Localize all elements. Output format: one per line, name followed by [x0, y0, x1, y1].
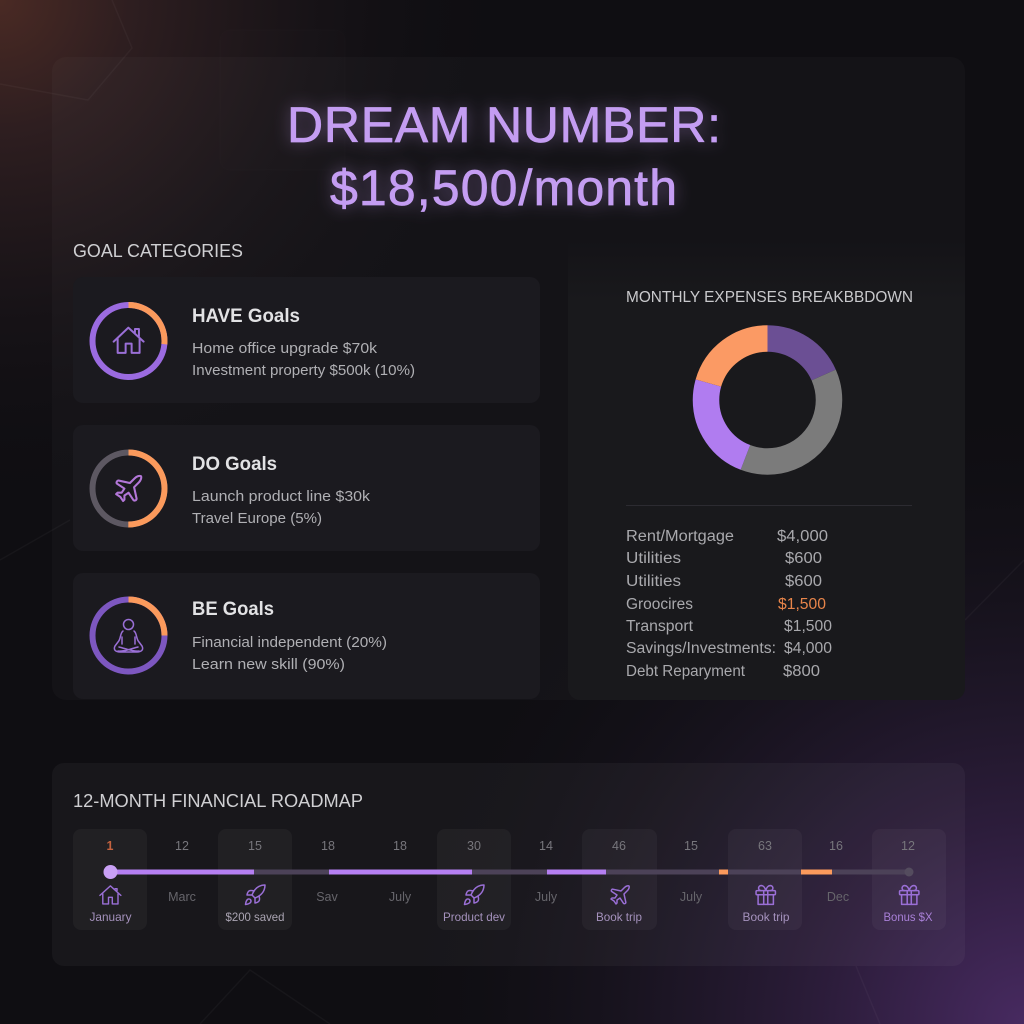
title — [287, 97, 721, 216]
month labels: July — [680, 890, 703, 904]
month labels — [168, 890, 849, 904]
month numbers: 14 — [539, 839, 553, 853]
month numbers: 63 — [758, 839, 772, 853]
month labels: July — [535, 890, 558, 904]
expense list: Debt Reparyment — [626, 663, 746, 680]
month labels: Dec — [827, 890, 849, 904]
icon: house — [114, 328, 144, 353]
milestone labels: Product dev — [443, 910, 505, 924]
text: HAVE goals: Home office upgrade $70k — [192, 340, 378, 357]
progress ring: BE — [92, 600, 164, 672]
panel: BE goals — [73, 573, 540, 699]
title: DREAM NUMBER: — [287, 97, 721, 153]
icon: gift milestone — [756, 886, 775, 904]
icon: gift milestone — [900, 886, 919, 904]
text: HAVE goals: Investment property $500k (10%) — [192, 362, 415, 379]
text: DO goals: DO Goals — [192, 454, 277, 475]
month numbers — [107, 839, 915, 853]
icon: rocket milestone — [464, 885, 484, 904]
month numbers: 18 — [393, 839, 407, 853]
expense list: $1,500 — [784, 618, 832, 635]
text: DO goals: Launch product line $30k — [192, 488, 371, 505]
panel: main — [52, 57, 965, 700]
panel: monthly expenses — [568, 240, 965, 700]
month numbers: 15 — [248, 839, 262, 853]
heading: roadmap: 12-MONTH FINANCIAL ROADMAP — [73, 791, 363, 811]
expense list: Transport — [626, 618, 694, 635]
milestone labels — [90, 910, 932, 924]
expense list: $800 — [783, 663, 820, 680]
expense list: $600 — [785, 550, 822, 567]
text: HAVE goals — [192, 306, 415, 379]
milestone labels: Book trip — [742, 910, 790, 924]
month numbers: 12 — [175, 839, 189, 853]
milestone labels: Book trip — [596, 910, 642, 924]
month labels: Sav — [316, 890, 339, 904]
expense list: $600 — [785, 573, 822, 590]
milestone labels: $200 saved — [226, 910, 284, 924]
text: DO goals: Travel Europe (5%) — [192, 510, 322, 527]
expense list: Groocires — [626, 596, 693, 613]
donut chart — [706, 338, 829, 462]
month labels: July — [389, 890, 412, 904]
icon: plane milestone — [611, 886, 629, 904]
month numbers: 16 — [829, 839, 843, 853]
expense list: Utilities — [626, 573, 681, 590]
heading: goal categories: GOAL CATEGORIES — [73, 241, 243, 261]
month numbers: 30 — [467, 839, 481, 853]
expense list: $4,000 — [777, 528, 828, 545]
title: $18,500/month — [330, 160, 677, 216]
timeline track — [104, 865, 914, 879]
expense list: Utilities — [626, 550, 681, 567]
text: DO goals — [192, 454, 371, 527]
milestone labels: Bonus $X — [884, 910, 932, 924]
icon: rocket milestone — [246, 885, 265, 904]
text: BE goals: BE Goals — [192, 599, 274, 620]
month numbers: 18 — [321, 839, 335, 853]
expense list: Rent/Mortgage — [626, 528, 734, 545]
progress ring: HAVE — [92, 305, 164, 377]
expense list: Savings/Investments: — [626, 640, 776, 657]
heading: monthly expenses: MONTHLY EXPENSES BREAKBBDOWN — [626, 289, 913, 306]
month numbers: 12 — [901, 839, 915, 853]
panel: HAVE goals — [73, 277, 540, 403]
progress ring: DO — [92, 452, 164, 524]
month numbers: 1 — [107, 839, 114, 853]
month labels: Marc — [168, 890, 196, 904]
milestone labels: January — [90, 910, 132, 924]
text: HAVE goals: HAVE Goals — [192, 306, 300, 327]
expense list: $4,000 — [784, 640, 832, 657]
icon: plane — [116, 476, 141, 501]
icon: house milestone — [100, 886, 121, 904]
text: BE goals — [192, 599, 387, 673]
expense list: $1,500 — [778, 596, 826, 613]
month numbers: 46 — [612, 839, 626, 853]
icon: meditation — [114, 620, 143, 652]
text: BE goals: Financial independent (20%) — [192, 634, 387, 651]
milestone cards — [73, 829, 946, 930]
expense list — [626, 528, 832, 680]
panel: DO goals — [73, 425, 540, 551]
text: BE goals: Learn new skill (90%) — [192, 656, 345, 673]
month numbers: 15 — [684, 839, 698, 853]
panel: roadmap — [52, 763, 965, 966]
